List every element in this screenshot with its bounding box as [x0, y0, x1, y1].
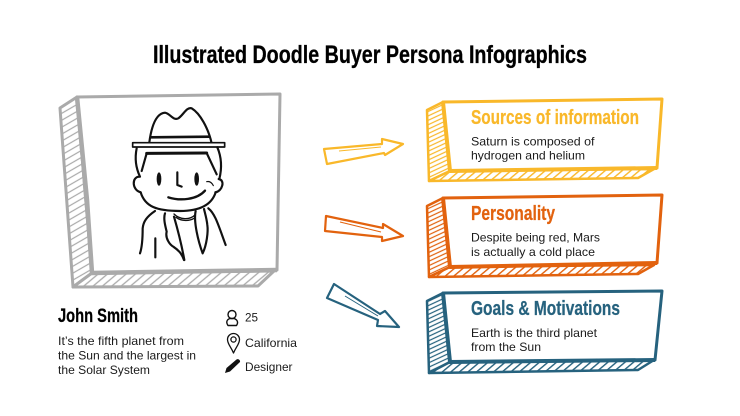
persona bio: It’s the fifth planet from	[58, 334, 184, 348]
body text	[471, 135, 595, 163]
body text: from the Sun	[471, 340, 541, 354]
body text: Despite being red, Mars	[471, 231, 600, 245]
location: California	[245, 336, 297, 350]
body text	[471, 231, 600, 259]
box frame	[427, 99, 662, 181]
heading: Sources of information	[471, 107, 639, 129]
panel: goals and motivations	[427, 291, 662, 373]
panel: persona portrait frame	[60, 94, 280, 287]
arrow: to goals and motivations	[327, 284, 399, 327]
arrow: to personality	[325, 216, 403, 241]
illustration: man with hat	[133, 108, 226, 260]
icon: person	[227, 310, 238, 326]
body text: hydrogen and helium	[471, 149, 585, 163]
panel: sources of information	[427, 99, 662, 181]
body text: is actually a cold place	[471, 245, 595, 259]
persona facts	[225, 310, 297, 374]
body text: Earth is the third planet	[471, 326, 598, 340]
persona bio: the Solar System	[58, 363, 150, 377]
age: 25	[245, 311, 258, 325]
persona name: John Smith	[58, 306, 138, 327]
arrow: to sources of information	[324, 139, 403, 164]
occupation: Designer	[245, 360, 292, 374]
frame side hatching	[60, 94, 280, 287]
panel: personality	[427, 195, 662, 277]
persona description	[58, 306, 196, 377]
box frame	[427, 195, 662, 277]
persona bio	[58, 334, 196, 377]
body text	[471, 326, 598, 354]
title: Illustrated Doodle Buyer Persona Infographics	[153, 41, 587, 69]
icon: location pin	[228, 334, 240, 353]
box frame	[427, 291, 662, 373]
persona bio: the Sun and the largest in	[58, 348, 196, 362]
heading: Personality	[471, 203, 556, 225]
body text: Saturn is composed of	[471, 135, 595, 149]
heading: Goals & Motivations	[471, 298, 620, 320]
icon: pencil	[225, 359, 240, 373]
